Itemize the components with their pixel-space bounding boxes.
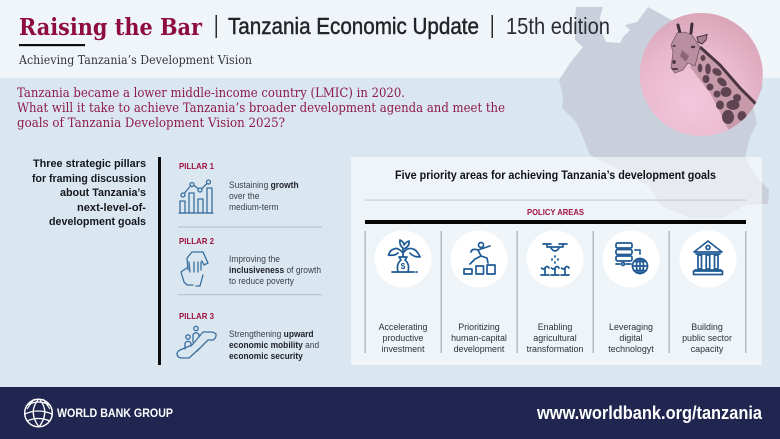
giraffe photo circle [640, 13, 763, 136]
label: technologyt [608, 344, 654, 354]
pillar 1 text: medium-term [229, 202, 279, 212]
left intro text: Three strategic pillars [33, 158, 146, 170]
left intro text: about Tanzania’s [60, 187, 146, 199]
icon: escalator [177, 326, 216, 358]
label: capacity [691, 344, 724, 354]
panel heading: Five priority areas for achieving Tanzania’s development goals [395, 169, 716, 182]
pillar 1 text: over the [229, 191, 259, 201]
icon: giraffe head [671, 32, 700, 73]
left intro text: for framing discussion [32, 173, 146, 185]
label [379, 322, 427, 354]
icon: database and globe [616, 243, 648, 274]
icon: giraffe neck [690, 46, 760, 131]
pillar 2 text: to reduce poverty [229, 276, 294, 286]
pillar 1 [179, 161, 299, 213]
icon: giraffe horns [678, 24, 692, 33]
icon: plant growing from money bag [388, 240, 420, 272]
pillar 3 text [229, 329, 319, 361]
icon: giraffe mane [700, 47, 757, 105]
title: Tanzania Economic Update: Tanzania Economic Update [228, 13, 479, 39]
label: Leveraging [609, 322, 653, 332]
intro question text: goals of Tanzania Development Vision 2025? [17, 116, 285, 131]
panel: policy areas [351, 157, 762, 365]
left intro text: next-level-of- [77, 202, 146, 214]
pillar 3 text: economic mobility and [229, 340, 319, 350]
accent underline [19, 44, 85, 46]
vertical black bar [158, 157, 161, 365]
icon: bar chart with trend line [179, 180, 213, 213]
icon: giraffe spots [698, 55, 746, 124]
intro question text [17, 86, 505, 131]
icon: person leaping up steps [464, 242, 495, 274]
pillar 3 [177, 311, 319, 361]
label: development [454, 344, 505, 354]
label: agricultural [533, 333, 577, 343]
policy area 3: agriculture [526, 230, 584, 354]
policy areas label: POLICY AREAS [527, 207, 584, 217]
organisation name: WORLD BANK GROUP [57, 406, 173, 420]
left intro text [32, 158, 146, 228]
label [682, 322, 732, 354]
pillar 2 label: PILLAR 2 [179, 236, 214, 246]
icon: drone watering crops [541, 244, 569, 275]
label: productive [383, 333, 424, 343]
subtitle: Achieving Tanzania’s Development Vision [18, 53, 252, 67]
pillar 2 text: Improving the [229, 254, 280, 264]
icon: giraffe face details [672, 45, 695, 70]
icon: hands [181, 252, 208, 286]
intro question text: Tanzania became a lower middle-income country (LMIC) in 2020. [17, 86, 405, 101]
label: public sector [682, 333, 732, 343]
label: Prioritizing [458, 322, 500, 332]
pillar 2 text [229, 254, 321, 286]
map of Tanzania [559, 7, 769, 218]
pillar 1 label: PILLAR 1 [179, 161, 214, 171]
pillar 2 text: inclusiveness of growth [229, 265, 321, 275]
icon: giraffe ear [697, 34, 707, 44]
pillar 3 text: Strengthening upward [229, 329, 314, 339]
title: Raising the Bar: Raising the Bar [19, 14, 203, 41]
label: Accelerating [379, 322, 427, 332]
policy area 1: investment [374, 230, 432, 354]
title [19, 13, 610, 41]
policy area 4: digital [602, 230, 660, 354]
label: transformation [527, 344, 583, 354]
pillar 1 text [229, 180, 299, 212]
icon: World Bank globe [25, 399, 52, 427]
label: Building [691, 322, 723, 332]
label [527, 322, 583, 354]
label: investment [382, 344, 425, 354]
left intro text: development goals [49, 216, 146, 228]
pillar 3 label: PILLAR 3 [179, 311, 214, 321]
policy area 2: human capital [450, 230, 508, 354]
pillar 2 [179, 236, 321, 286]
icon text: dollar: $ [401, 262, 406, 271]
footer band [0, 387, 780, 439]
pillar 3 text: economic security [229, 351, 303, 361]
label [608, 322, 654, 354]
label: human-capital [451, 333, 507, 343]
label: digital [619, 333, 643, 343]
label [451, 322, 507, 354]
intro question text: What will it take to achieve Tanzania’s broader development agenda and meet the [17, 101, 505, 116]
label: Enabling [538, 322, 572, 332]
title: edition: 15th edition [506, 13, 610, 39]
icon: classical government building [694, 241, 722, 274]
pillar 1 text: Sustaining growth [229, 180, 299, 190]
policy area 5: public sector [680, 230, 736, 354]
